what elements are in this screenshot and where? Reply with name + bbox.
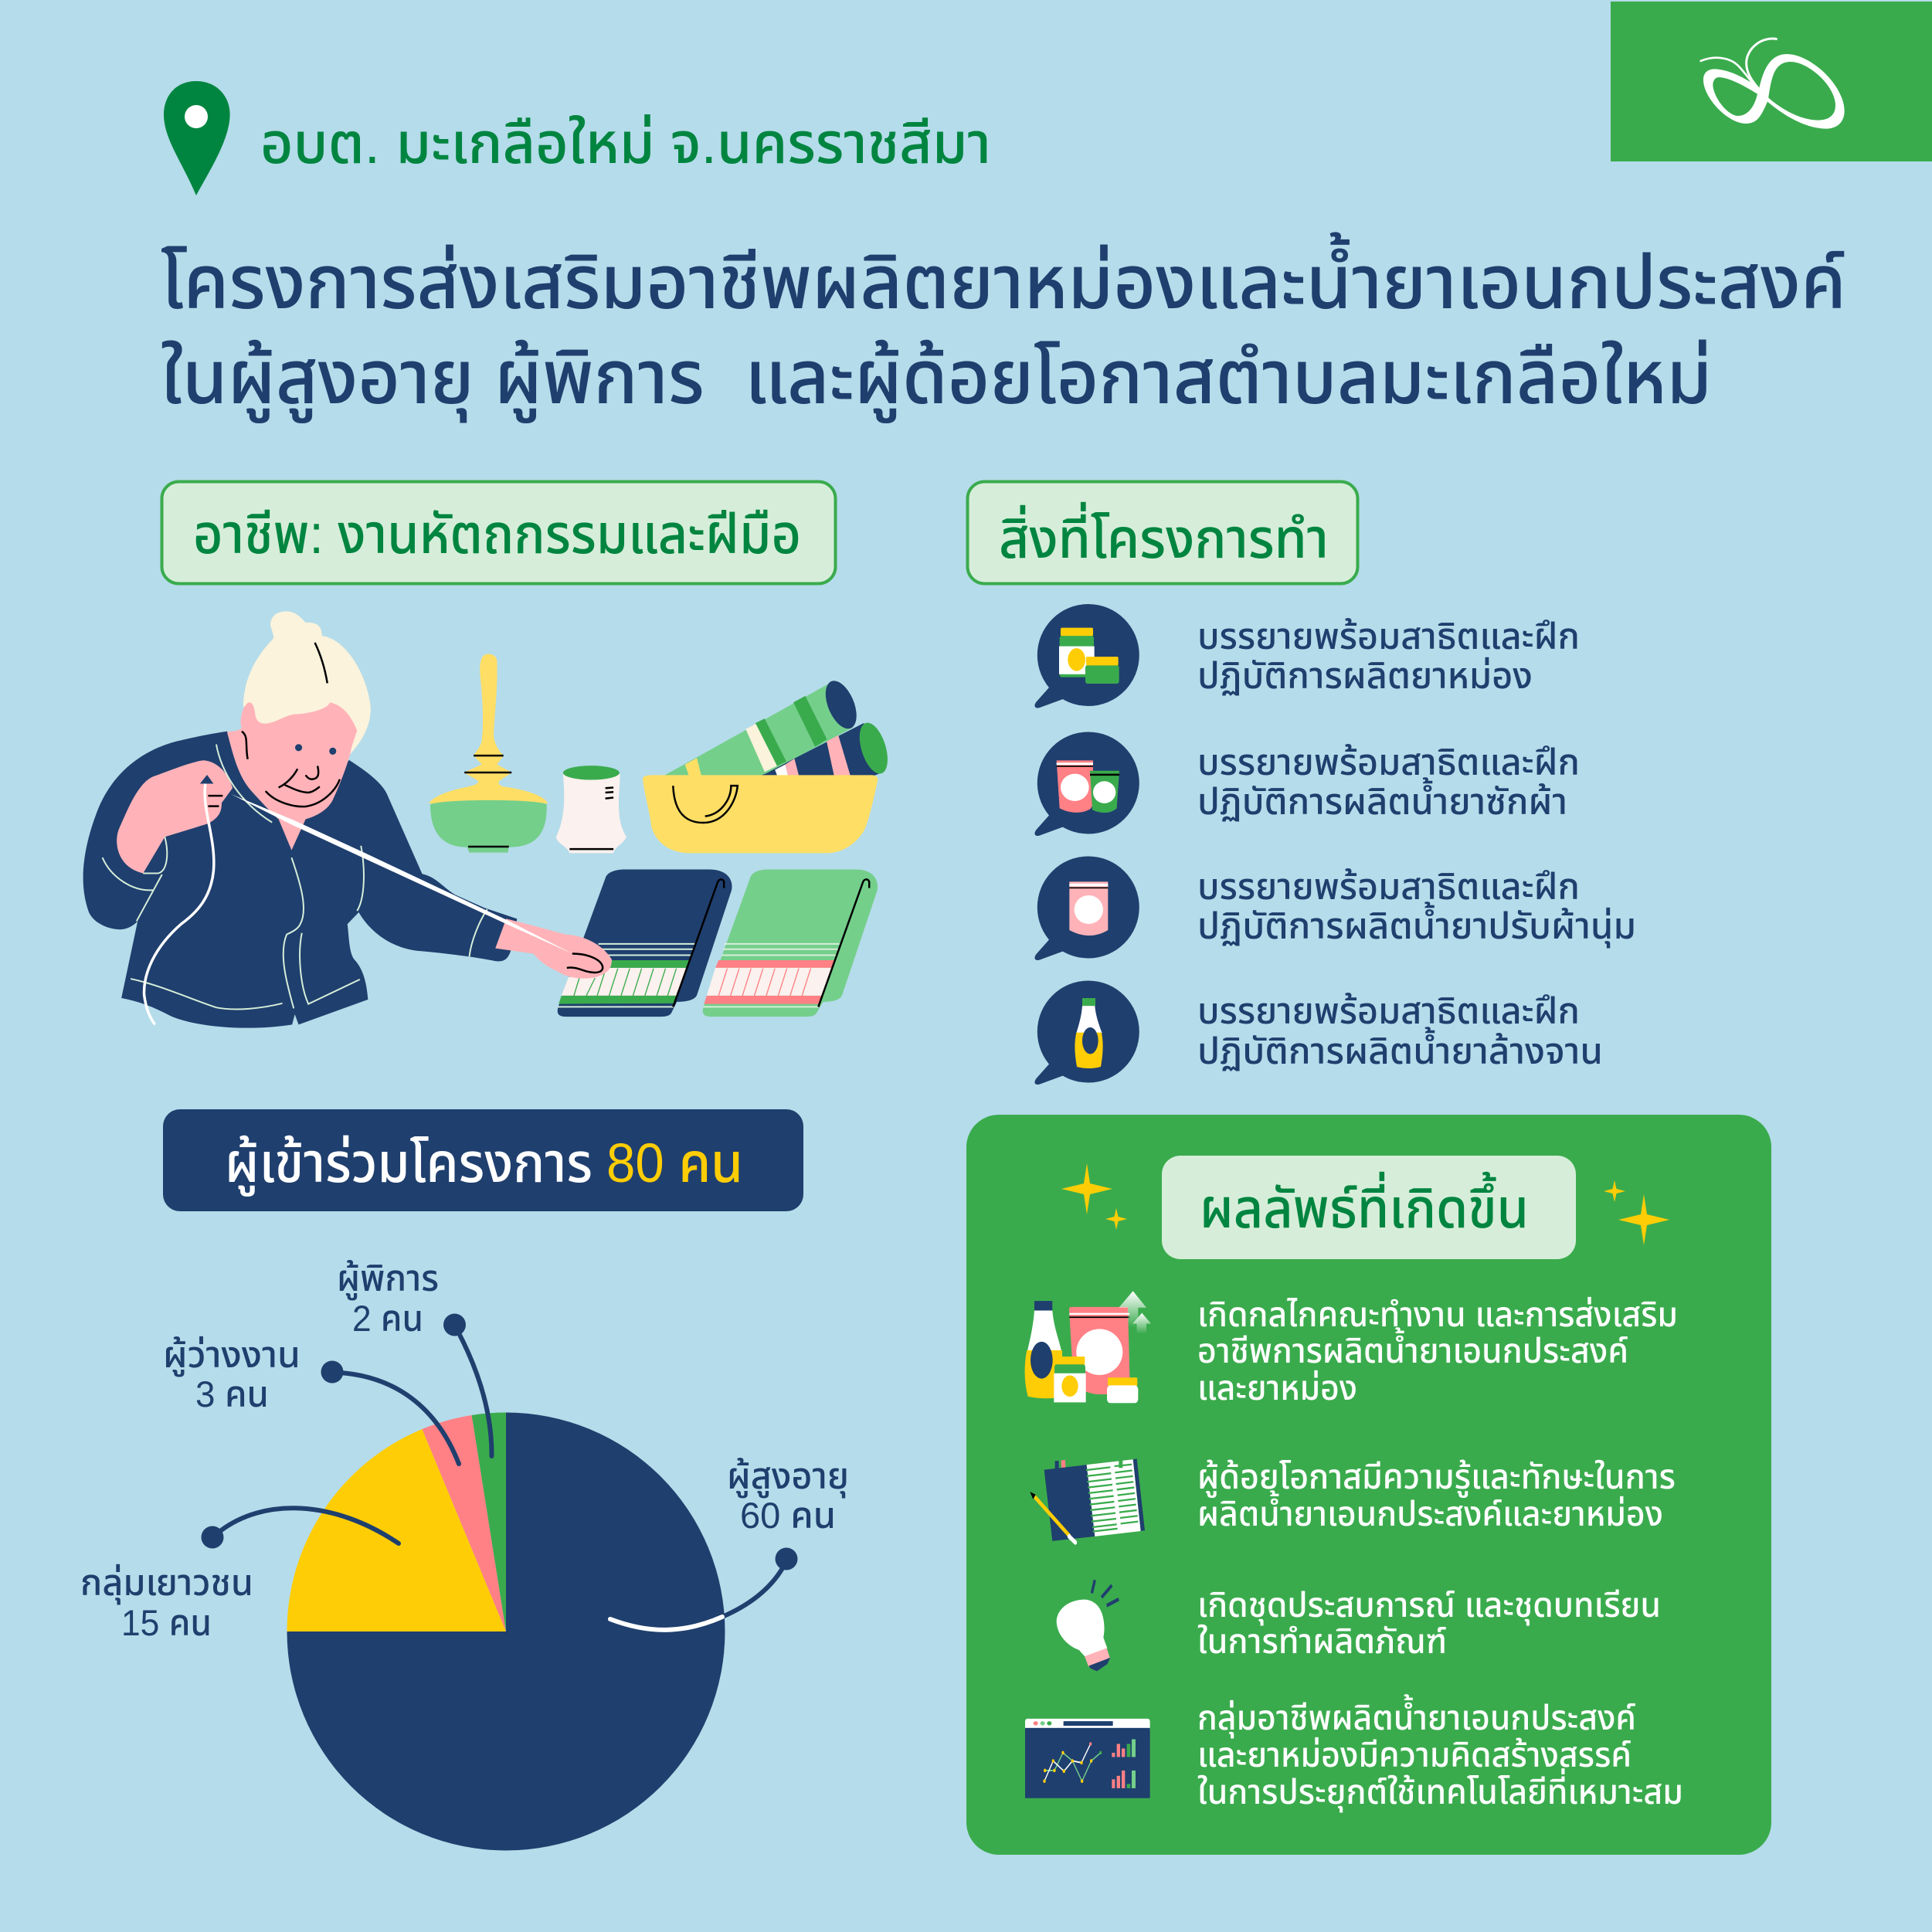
rolled textiles <box>664 680 892 776</box>
icon: sparkles left <box>1061 1163 1127 1230</box>
eyes <box>295 744 336 755</box>
label: unemployed: 3 คน <box>195 1373 269 1414</box>
activity text 3: ปฏิบัติการผลิตน้ำยาปรับผ้านุ่ม <box>1197 901 1636 948</box>
location heading: อบต. มะเกลือใหม่ จ.นครราชสีมา <box>260 111 991 175</box>
green folded cloth <box>703 869 878 1017</box>
face <box>227 702 357 851</box>
label: disabled: ผู้พิการ <box>337 1258 439 1300</box>
icon: speech bubble with pouches <box>1034 732 1139 836</box>
slice: youth 15 <box>287 1429 506 1632</box>
activity text 2: บรรยายพร้อมสาธิตและฝึก <box>1197 742 1580 783</box>
activity text 1: บรรยายพร้อมสาธิตและฝึก <box>1197 616 1580 657</box>
icon: notebook and pencil <box>1030 1456 1145 1543</box>
heading box: occupation: อาชีพ: งานหัตถกรรมและฝีมือ <box>193 504 801 565</box>
heading box: project activities <box>967 482 1358 584</box>
illustration: elderly woman crafting with products <box>83 611 892 1028</box>
icon: speech bubble with softener pouch <box>1034 856 1139 960</box>
finger lines <box>208 796 222 806</box>
jacket seams <box>103 745 487 1009</box>
activity text 1 <box>1197 616 1580 696</box>
label: disabled <box>337 1258 439 1339</box>
label: unemployed <box>163 1334 300 1414</box>
result text 3: ในการทำผลิตภัณฑ์ <box>1197 1621 1447 1661</box>
leader: youth <box>201 1508 399 1548</box>
activity text 2: ปฏิบัติการผลิตน้ำยาซักผ้า <box>1197 777 1567 822</box>
vase with lid <box>429 654 548 853</box>
label: disabled: 2 คน <box>352 1298 423 1339</box>
result text 3 <box>1197 1585 1661 1661</box>
left hand <box>117 760 233 873</box>
label: elderly <box>727 1455 849 1536</box>
leader: unemployed <box>321 1361 459 1464</box>
result text 2: ผู้ด้อยโอกาสมีความรู้และทักษะในการ <box>1197 1457 1676 1498</box>
icon: location pin <box>164 81 230 195</box>
activity text 3: บรรยายพร้อมสาธิตและฝึก <box>1197 866 1580 907</box>
activity text 4 <box>1197 990 1603 1071</box>
result text 4 <box>1197 1694 1683 1813</box>
result text 1: เกิดกลไกคณะทำงาน และการส่งเสริม <box>1197 1295 1678 1334</box>
participants banner: 80 คน <box>606 1133 743 1194</box>
result text 4: ในการประยุกต์ใช้เทคโนโลยีที่เหมาะสม <box>1197 1768 1683 1813</box>
leader: elderly <box>610 1548 797 1630</box>
heading: results: ผลลัพธ์ที่เกิดขึ้น <box>1200 1171 1529 1240</box>
label: elderly: 60 คน <box>740 1495 836 1536</box>
result text 1: และยาหม่อง <box>1197 1368 1357 1407</box>
cream bottle <box>556 766 626 853</box>
result text 1 <box>1197 1295 1678 1407</box>
result text 2: ผลิตน้ำยาเอนกประสงค์และยาหม่อง <box>1197 1490 1663 1533</box>
yellow basket <box>643 775 878 853</box>
icon: speech bubble with jars <box>1034 604 1139 708</box>
icon: sparkles right <box>1604 1180 1669 1245</box>
label: youth: 15 คน <box>121 1602 212 1643</box>
label: youth: กลุ่มเยาวชน <box>80 1562 253 1604</box>
result text 3: เกิดชุดประสบการณ์ และชุดบทเรียน <box>1197 1585 1661 1626</box>
needle thread <box>231 794 572 954</box>
slice: unemployed 3 <box>422 1415 506 1632</box>
heading: results <box>1162 1156 1576 1259</box>
result text 4: กลุ่มอาชีพผลิตน้ำยาเอนกประสงค์ <box>1197 1694 1636 1739</box>
pie chart: participants <box>80 1258 849 1851</box>
activity text 4: บรรยายพร้อมสาธิตและฝึก <box>1197 990 1580 1031</box>
icon: light bulb <box>1057 1580 1119 1671</box>
slice: disabled 2 <box>472 1412 506 1632</box>
result text 2 <box>1197 1457 1676 1533</box>
panel: results <box>966 1115 1771 1855</box>
title: โครงการส่งเสริมอาชีพผลิตยาหม่องและน้ำยาเอนกประสงค์ <box>161 232 1846 324</box>
face lines <box>242 643 340 806</box>
leader: disabled <box>443 1313 492 1456</box>
title: ในผู้สูงอายุ ผู้พิการ และผู้ด้อยโอกาสตำบลมะเกลือใหม่ <box>161 335 1712 423</box>
label: youth <box>80 1562 253 1643</box>
label: unemployed: ผู้ว่างงาน <box>163 1334 300 1377</box>
slice: elderly 60 <box>287 1412 725 1851</box>
activity list <box>1034 604 1636 1085</box>
navy folded cloth <box>558 869 732 1017</box>
participants banner <box>163 1109 803 1211</box>
right hand finger line <box>567 954 603 973</box>
jacket <box>83 732 517 1028</box>
participants banner: ผู้เข้าร่วมโครงการ <box>225 1133 593 1197</box>
result text 4: และยาหม่องมีความคิดสร้างสรรค์ <box>1197 1735 1632 1774</box>
heading box: occupation <box>162 482 836 584</box>
activity text 1: ปฏิบัติการผลิตยาหม่อง <box>1197 655 1533 696</box>
icon: product group <box>1025 1291 1151 1403</box>
logo panel <box>1611 2 1932 161</box>
icon: butterfly infinity logo <box>1700 39 1845 129</box>
icon: speech bubble with dish soap bottle <box>1034 981 1139 1085</box>
icon: dashboard window <box>1025 1719 1150 1798</box>
activity text 2 <box>1197 742 1580 822</box>
needle point <box>200 775 213 783</box>
hanging thread <box>144 783 214 1024</box>
activity text 3 <box>1197 866 1636 948</box>
heading box: project activities: สิ่งที่โครงการทำ <box>999 501 1329 570</box>
label: elderly: ผู้สูงอายุ <box>727 1455 849 1498</box>
right hand <box>495 918 612 979</box>
result text 1: อาชีพการผลิตน้ำยาเอนกประสงค์ <box>1197 1327 1628 1370</box>
activity text 4: ปฏิบัติการผลิตน้ำยาล้างจาน <box>1197 1027 1603 1071</box>
title <box>161 232 1846 423</box>
hair <box>243 611 371 755</box>
